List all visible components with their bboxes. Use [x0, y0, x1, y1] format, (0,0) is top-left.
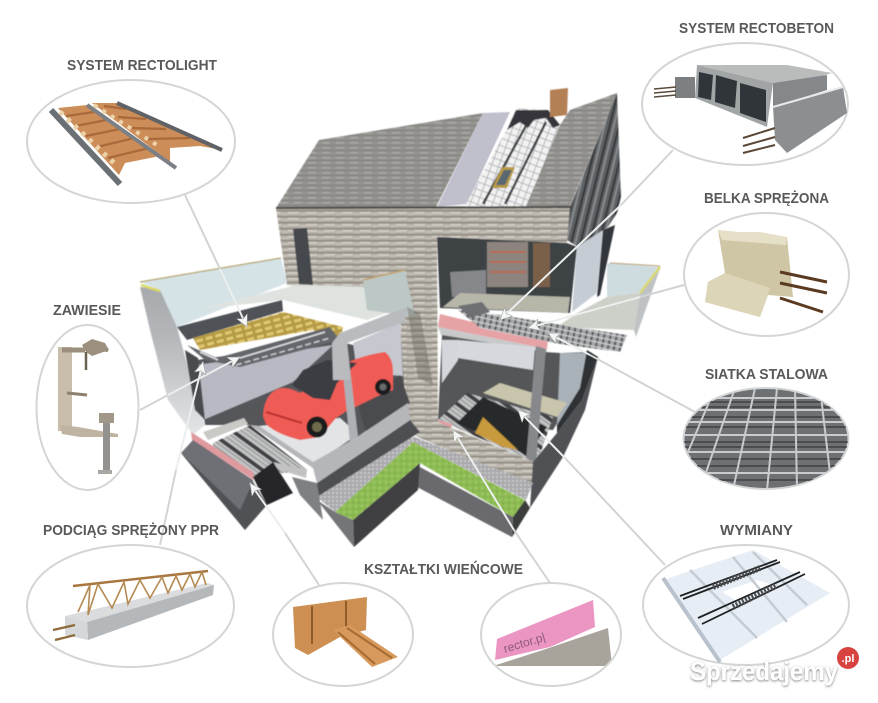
small glass balustrade: [363, 270, 415, 317]
callout: System Rectobeton: [642, 20, 848, 165]
garage platform: [259, 418, 358, 465]
upper glazing: [572, 230, 603, 312]
leader: Belka: [528, 285, 684, 328]
ring: [27, 80, 235, 203]
heading: Kształtki wieńcowe: KSZTAŁTKI WIEŃCOWE: [364, 561, 523, 578]
hanger clamp: [60, 339, 118, 474]
brick wall: [276, 208, 570, 434]
left terrace glass: [140, 258, 287, 327]
heading: WYMIANY: [720, 522, 793, 539]
lower pillars: [526, 346, 546, 462]
leader: Rectolight: [185, 195, 247, 327]
house cutaway illustration: [140, 88, 660, 547]
callout: Zawiesie: [36, 302, 138, 490]
heading: PODCIĄG SPRĘŻONY PPR: [43, 522, 219, 539]
callout: pink insulation form: [481, 583, 621, 686]
callout: System Rectolight: [27, 57, 235, 203]
Rectolight ceiling panels: [193, 312, 343, 350]
heading: SYSTEM RECTOBETON: [679, 20, 834, 37]
window on brick wall: [293, 228, 313, 285]
left roof: [276, 113, 483, 208]
lawn retaining walls: [317, 463, 530, 547]
car: [263, 352, 393, 440]
leader: Zawiesie: [140, 357, 240, 410]
ring: [684, 388, 848, 489]
lower room: [438, 335, 598, 433]
callout: Wymiany: [643, 522, 849, 665]
ring: [642, 43, 848, 165]
prestressed girder: [53, 571, 214, 640]
concrete floor slab edge: [250, 403, 410, 483]
badge text: .pl: [842, 653, 854, 665]
pink edge strip: [191, 432, 254, 480]
right terrace: [557, 263, 660, 337]
lower brick plinth: [403, 422, 537, 487]
leader: Kształtki left: [250, 483, 319, 585]
garage pillar: [333, 342, 358, 443]
upper room: [437, 237, 577, 313]
watermark: [690, 647, 859, 686]
suspended ceiling beams: [187, 327, 340, 367]
ring: [36, 325, 138, 490]
callout: wooden rim form: [273, 583, 413, 686]
hollow core block: [654, 65, 847, 153]
leader: Wymiany: [518, 410, 665, 565]
gable side cladding: [567, 93, 621, 247]
steel mesh: [684, 389, 848, 488]
callout: Podciąg sprężony PPR: [27, 522, 234, 667]
chimney: [550, 88, 568, 117]
left outer concrete wall: [140, 287, 205, 435]
stairwell opening: [253, 462, 293, 505]
right foundation: [530, 357, 598, 508]
watermark wordmark: Sprzedajemy: [690, 656, 838, 686]
leader: Kształtki right: [453, 430, 550, 583]
callout: Belka sprężona: [684, 190, 849, 336]
orange forms: [293, 597, 398, 667]
garage interior: [197, 323, 410, 465]
gravel strip left: [317, 434, 413, 512]
ground floor beams: [212, 425, 307, 477]
right roof: [526, 93, 617, 206]
gravel strip right: [412, 436, 533, 500]
eave line: [276, 207, 570, 208]
stair opening: [438, 393, 553, 463]
insulated roof section: [465, 108, 560, 206]
pink board on concrete: rector.p|: [502, 630, 547, 656]
leader: Siatka: [548, 333, 695, 412]
heading: BELKA SPRĘŻONA: [704, 190, 829, 207]
heading: SIATKA STALOWA: [705, 366, 828, 383]
dark roof edge: [177, 300, 283, 340]
concrete beside opening: [292, 477, 323, 520]
roof membrane: [437, 112, 510, 207]
concrete wall head: [332, 307, 407, 380]
ring: [481, 583, 621, 686]
left foundation: [181, 440, 267, 530]
first floor slab with beams: [438, 302, 627, 355]
terrace deck: [195, 285, 400, 320]
callout: Siatka stalowa: [682, 369, 850, 490]
lawn: [335, 442, 525, 520]
watermark badge: [837, 647, 859, 669]
leader: Podciąg: [160, 362, 203, 545]
leader: Rectobeton: [500, 150, 673, 320]
ring: [27, 545, 234, 667]
heading: ZAWIESIE: [53, 302, 121, 319]
ring: [273, 583, 413, 686]
heading: SYSTEM RECTOLIGHT: [67, 57, 217, 74]
wood panels and rails: [51, 103, 222, 184]
ring: [643, 545, 849, 665]
trimmer assembly: [663, 550, 830, 662]
concrete beam end: [705, 230, 827, 317]
ring: [684, 213, 849, 336]
